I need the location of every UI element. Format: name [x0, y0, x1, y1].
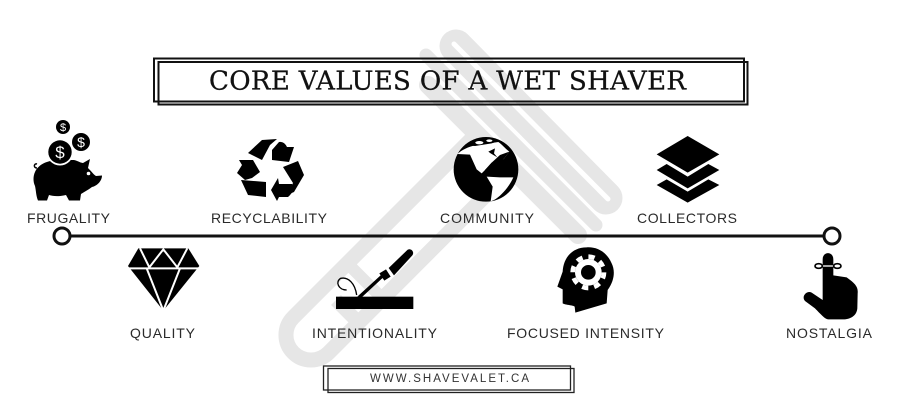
label: quality: QUALITY — [130, 325, 196, 341]
label: focused intensity: FOCUSED INTENSITY — [507, 325, 665, 341]
title: CORE VALUES OF A WET SHAVER — [209, 66, 687, 96]
icon: diamond — [128, 248, 199, 311]
icon: recycling arrows — [237, 139, 304, 201]
icon: piggy bank with coins: $ — [77, 134, 85, 150]
label: frugality: FRUGALITY — [27, 210, 111, 226]
label: collectors: COLLECTORS — [637, 210, 737, 226]
label: community: COMMUNITY — [440, 210, 535, 226]
footer url box — [324, 366, 574, 392]
label: recyclability: RECYCLABILITY — [211, 210, 328, 226]
icon: globe — [454, 137, 518, 202]
label: nostalgia: NOSTALGIA — [786, 325, 873, 341]
icon: chisel carving wood — [336, 249, 413, 309]
background: razor watermark — [286, 44, 608, 360]
timeline — [54, 228, 840, 244]
icon: piggy bank with coins — [34, 120, 102, 200]
title box — [154, 58, 748, 104]
icon: finger with tied string — [804, 253, 858, 319]
icon: stacked layers — [657, 136, 719, 203]
icon: piggy bank with coins: $ — [60, 122, 66, 134]
website url: WWW.SHAVEVALET.CA — [370, 373, 529, 385]
icon: head with gear — [557, 247, 614, 313]
icon: piggy bank with coins: $ — [55, 143, 65, 162]
label: intentionality: INTENTIONALITY — [312, 325, 438, 341]
